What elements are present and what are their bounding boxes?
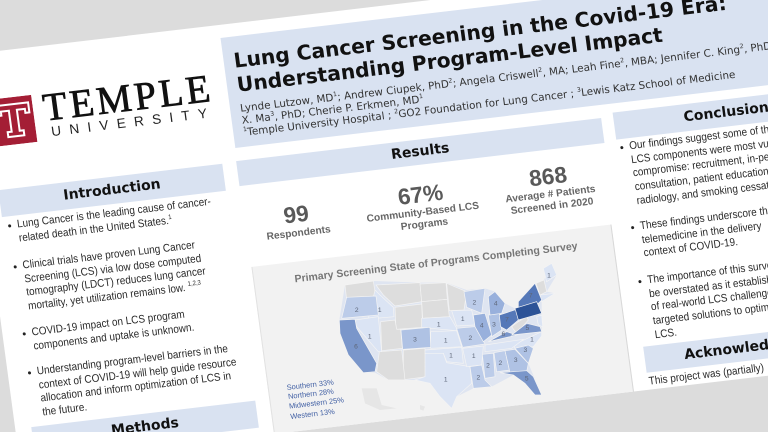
- state count labels: 2: [486, 362, 490, 369]
- state count labels: 1: [368, 333, 372, 340]
- state count labels: 4: [494, 301, 498, 308]
- value: 67%: [396, 180, 445, 210]
- panel: conclusions heading: [613, 85, 768, 140]
- label: Community-Based LCS: [366, 201, 480, 225]
- bullet 2: [639, 204, 768, 260]
- bullet 3: components and uptake is unknown.: [33, 321, 195, 352]
- legend: regional shares: Midwestern 25%: [289, 395, 345, 411]
- state count labels: [354, 272, 551, 383]
- stat: community-based programs: [366, 180, 480, 233]
- bullet 4: allocation and inform optimization of LCS in: [40, 370, 232, 405]
- authors: Lynde Lutzow, MD1; Andrew Ciupek, PhD2; Angela Criswell2, MA; Leah Fine2, MBA; Jennifer C. King2, PhD: [239, 40, 768, 115]
- state count labels: 1: [547, 272, 551, 279]
- legend: regional shares: Northern 28%: [288, 387, 335, 401]
- panel: introduction heading: Introduction: [62, 176, 162, 204]
- stat: average patients: [505, 162, 596, 217]
- state count labels: 4: [480, 323, 484, 330]
- pennsylvania, highest count: [515, 302, 542, 320]
- authors: X. Ma3, PhD; Cherie P. Erkmen, MD1: [241, 93, 423, 127]
- bullet 2: mortality, yet utilization remains low. 1,2,3: [27, 280, 201, 313]
- logo: Temple University: [0, 67, 216, 146]
- bullet 2: tomography (LDCT) reduces lung cancer: [26, 266, 207, 299]
- value: 868: [528, 162, 569, 191]
- state count labels: 6: [501, 331, 505, 338]
- states with two programs: [342, 288, 509, 388]
- state count labels: 3: [523, 347, 527, 354]
- states with three programs: [401, 313, 533, 373]
- bullet 3: COVID-19 impact on LCS program: [31, 308, 185, 339]
- value: 99: [282, 200, 310, 228]
- state count labels: 1: [444, 376, 448, 383]
- authors: 1Temple University Hospital ; 2GO2 Foundation for Lung Cancer ; 3Lewis Katz School of Medicine: [243, 69, 736, 139]
- state count labels: 1: [461, 316, 465, 323]
- panel: introduction heading: [0, 164, 226, 217]
- panel: results heading: [236, 118, 604, 186]
- label: Average # Patients: [505, 184, 596, 205]
- state count labels: 2: [476, 374, 480, 381]
- legend: regional shares: [286, 377, 345, 421]
- panel: methods heading: [31, 401, 259, 432]
- panel: title: [221, 0, 768, 148]
- states with four programs: [473, 292, 505, 342]
- state count labels: 3: [492, 322, 496, 329]
- bullet 3: [647, 259, 768, 341]
- states with seven programs: [499, 283, 542, 330]
- icon: red T shield: [0, 95, 38, 146]
- label: Programs: [400, 216, 449, 233]
- label: Respondents: [266, 224, 331, 243]
- bullet 1: Lung Cancer is the leading cause of cancer-: [16, 196, 212, 231]
- state count labels: 3: [413, 337, 417, 344]
- bullet 2: context of COVID-19.: [643, 237, 739, 260]
- alaska and hawaii: [362, 388, 425, 411]
- bullet 1: related death in the United States.1: [18, 214, 172, 244]
- bullet 4: the future.: [42, 401, 88, 419]
- map: US states: [339, 263, 557, 411]
- state count labels: 1: [437, 322, 441, 329]
- state count labels: 2: [498, 360, 502, 367]
- state count labels: 5: [525, 325, 529, 332]
- panel: acknowledgments heading: [643, 321, 768, 373]
- state count labels: 1: [530, 336, 534, 343]
- label: [505, 184, 596, 217]
- text: acknowledgment: This project was (partially): [648, 362, 765, 388]
- bullet 4: context of COVID-19 will help guide resource: [38, 356, 237, 391]
- bullet 2: [22, 239, 207, 313]
- state count labels: 7: [529, 292, 533, 299]
- bullet 4: [36, 343, 237, 419]
- bullet 2: Clinical trials have proven Lung Cancer: [22, 239, 196, 272]
- state count labels: 1: [449, 352, 453, 359]
- wordmark UNIVERSITY: UNIVERSITY: [50, 105, 216, 139]
- state count labels: 1: [444, 337, 448, 344]
- map silhouette underlay: [339, 263, 557, 408]
- bullet 1: [628, 123, 768, 207]
- text block: conclusions: [620, 123, 768, 341]
- state count labels: 7: [505, 317, 509, 324]
- state count labels: 2: [472, 299, 476, 306]
- gray states with no programs: [345, 280, 547, 380]
- choropleth map: [286, 240, 578, 421]
- bullet 3: [31, 308, 195, 352]
- state count labels: 6: [354, 344, 358, 351]
- bullet 2: telemedicine in the delivery: [641, 220, 762, 246]
- legend: regional shares: Western 13%: [290, 407, 336, 421]
- legend: regional shares: Southern 33%: [286, 377, 335, 392]
- chart title: Primary Screening State of Programs Completing Survey: [294, 240, 578, 285]
- state count labels: 3: [514, 357, 518, 364]
- text block: introduction: [8, 196, 237, 419]
- panel: map background: [251, 225, 634, 432]
- label: Screened in 2020: [510, 196, 594, 217]
- state count labels: 1: [472, 353, 476, 360]
- stat: respondents: [266, 200, 331, 243]
- panel: results heading: Results: [390, 140, 450, 163]
- state count labels: 2: [355, 307, 359, 314]
- states with one program: [355, 263, 557, 408]
- bullet 4: Understanding program-level barriers in the: [36, 343, 229, 378]
- wordmark TEMPLE: TEMPLE: [40, 67, 216, 130]
- states with five or six programs: [339, 319, 542, 395]
- state count labels: 1: [378, 307, 382, 314]
- state count labels: 5: [525, 376, 529, 383]
- state count labels: 2: [468, 335, 472, 342]
- title: Understanding Program-Level Impact: [235, 23, 664, 97]
- bullet 2: Screening (LCS) via low dose computed: [24, 252, 202, 285]
- bullet 3: LCS.: [654, 326, 678, 341]
